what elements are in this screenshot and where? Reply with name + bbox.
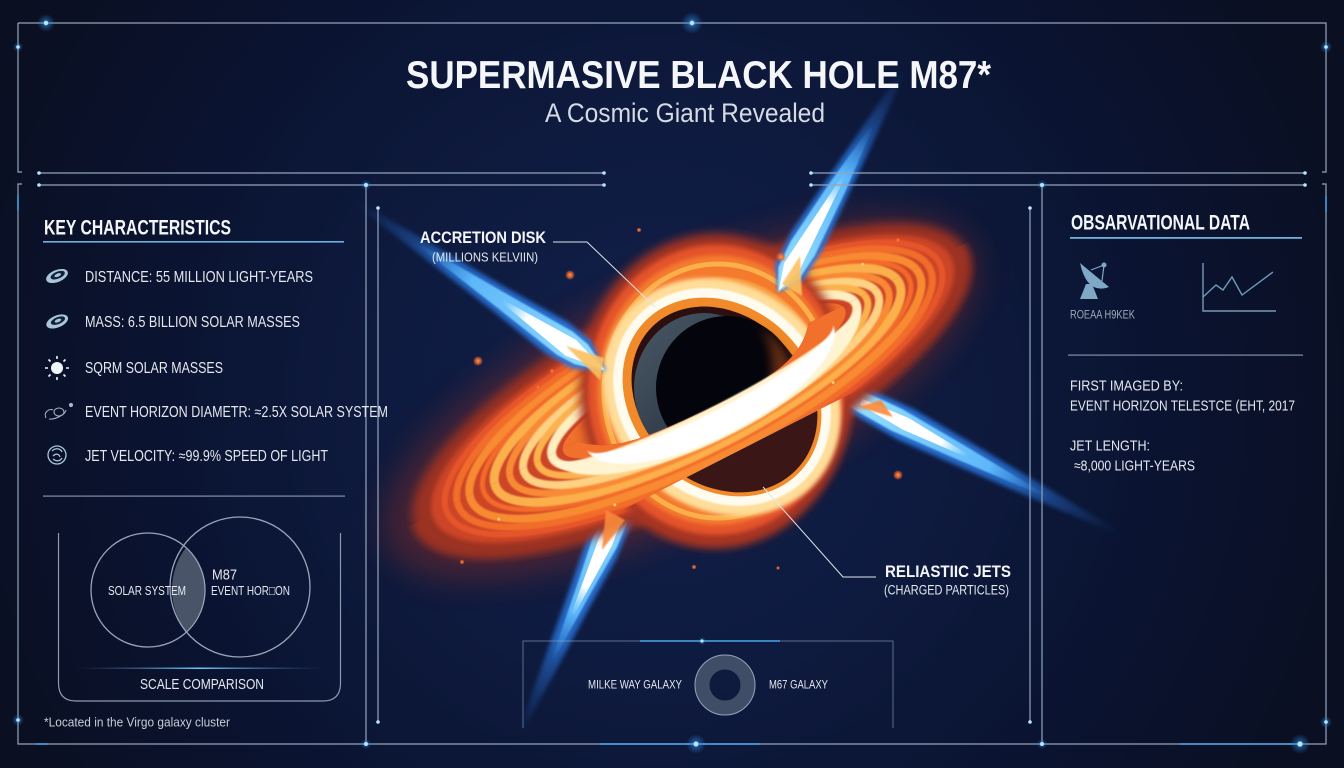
- text: event horizon diameter: EVENT HORIZON DIAMETR: ≈2.5X SOLAR SYSTEM: [85, 404, 388, 421]
- label: solar system: SOLAR SYSTEM: [108, 583, 186, 598]
- sublabel: millions kelvin: (MILLIONS KELVIIN): [432, 250, 538, 264]
- text: jet velocity: JET VELOCITY: ≈99.9% SPEED OF LIGHT: [85, 448, 328, 465]
- icon: orbit: [45, 403, 73, 419]
- icon: galaxy: [44, 266, 70, 286]
- panel: observational data: [1068, 212, 1303, 474]
- hot particles: [460, 228, 903, 570]
- back of accretion disk: [371, 160, 1011, 620]
- text: jet length: JET LENGTH:: [1070, 438, 1150, 454]
- scale comparison diagram: [58, 517, 340, 701]
- text: jet length value: ≈8,000 LIGHT-YEARS: [1074, 458, 1195, 474]
- heading: key characteristics: KEY CHARACTERISTICS: [44, 216, 231, 240]
- icon: donut: [702, 662, 748, 708]
- label: scale comparison: SCALE COMPARISON: [140, 676, 264, 693]
- bright front band: [552, 302, 886, 512]
- heading: observational data: OBSARVATIONAL DATA: [1071, 212, 1250, 234]
- icon: sun: [45, 356, 69, 380]
- label: dish: ROEAA H9KEK: [1070, 310, 1135, 322]
- callout: accretion disk: [420, 228, 655, 307]
- glow rule: [75, 668, 325, 669]
- icon: jet velocity: [48, 446, 66, 464]
- divider: [1068, 354, 1303, 356]
- label: jets: RELIASTIIC JETS: [885, 562, 1011, 581]
- label: milky way: MILKE WAY GALAXY: [588, 680, 682, 692]
- lensed halo behind hole: [554, 229, 890, 565]
- panel: key characteristics: [43, 216, 388, 730]
- upper jet base highlights: [566, 256, 802, 380]
- black hole illustration: [364, 77, 1108, 724]
- label: m87 galaxy: M67 GALAXY: [769, 680, 828, 692]
- line chart: [1203, 263, 1276, 311]
- label: accretion disk: ACCRETION DISK: [420, 228, 547, 247]
- jet: upper left: [343, 185, 617, 387]
- footnote: *Located in the Virgo galaxy cluster: [44, 716, 230, 730]
- text: solar masses: SQRM SOLAR MASSES: [85, 360, 223, 377]
- panel: galaxy comparison: [588, 655, 828, 715]
- title: SUPERMASIVE BLACK HOLE M87*: [406, 54, 992, 97]
- circle: event horizon: [170, 517, 310, 657]
- heading rule: [1070, 237, 1302, 239]
- text: first imaged by: FIRST IMAGED BY:: [1070, 378, 1183, 394]
- donut outline: [695, 655, 755, 715]
- label: event horizon: EVENT HOR□ON: [211, 583, 290, 598]
- jet: upper right: [762, 59, 921, 301]
- circle overlap: [172, 548, 204, 632]
- lower lensed ring below the disk: [622, 392, 858, 554]
- icon: galaxy mass: [44, 312, 70, 331]
- text: event horizon telescope: EVENT HORIZON TELESTCE (EHT, 2017: [1070, 398, 1295, 414]
- event horizon: [582, 257, 862, 537]
- circle: solar system: [91, 533, 205, 647]
- heading rule: [43, 241, 344, 243]
- callout: relativistic jets: [763, 487, 1011, 598]
- label: m87: M87: [212, 566, 237, 584]
- leader line: [763, 487, 876, 577]
- lower jet base highlights: [602, 400, 893, 550]
- subtitle: A Cosmic Giant Revealed: [545, 98, 825, 128]
- jet: lower right: [844, 382, 1127, 548]
- jet: lower left: [504, 490, 641, 741]
- text: distance: DISTANCE: 55 MILLION LIGHT-YEARS: [85, 269, 313, 286]
- divider: [43, 496, 345, 497]
- scale box: [58, 533, 340, 701]
- ambient glow: [334, 144, 1026, 652]
- icon: radio dish: [1080, 262, 1109, 299]
- text: mass: MASS: 6.5 BILLION SOLAR MASSES: [85, 314, 300, 331]
- leader line: [553, 242, 655, 307]
- sublabel: charged particles: (CHARGED PARTICLES): [884, 582, 1009, 598]
- front of accretion disk: [410, 242, 976, 562]
